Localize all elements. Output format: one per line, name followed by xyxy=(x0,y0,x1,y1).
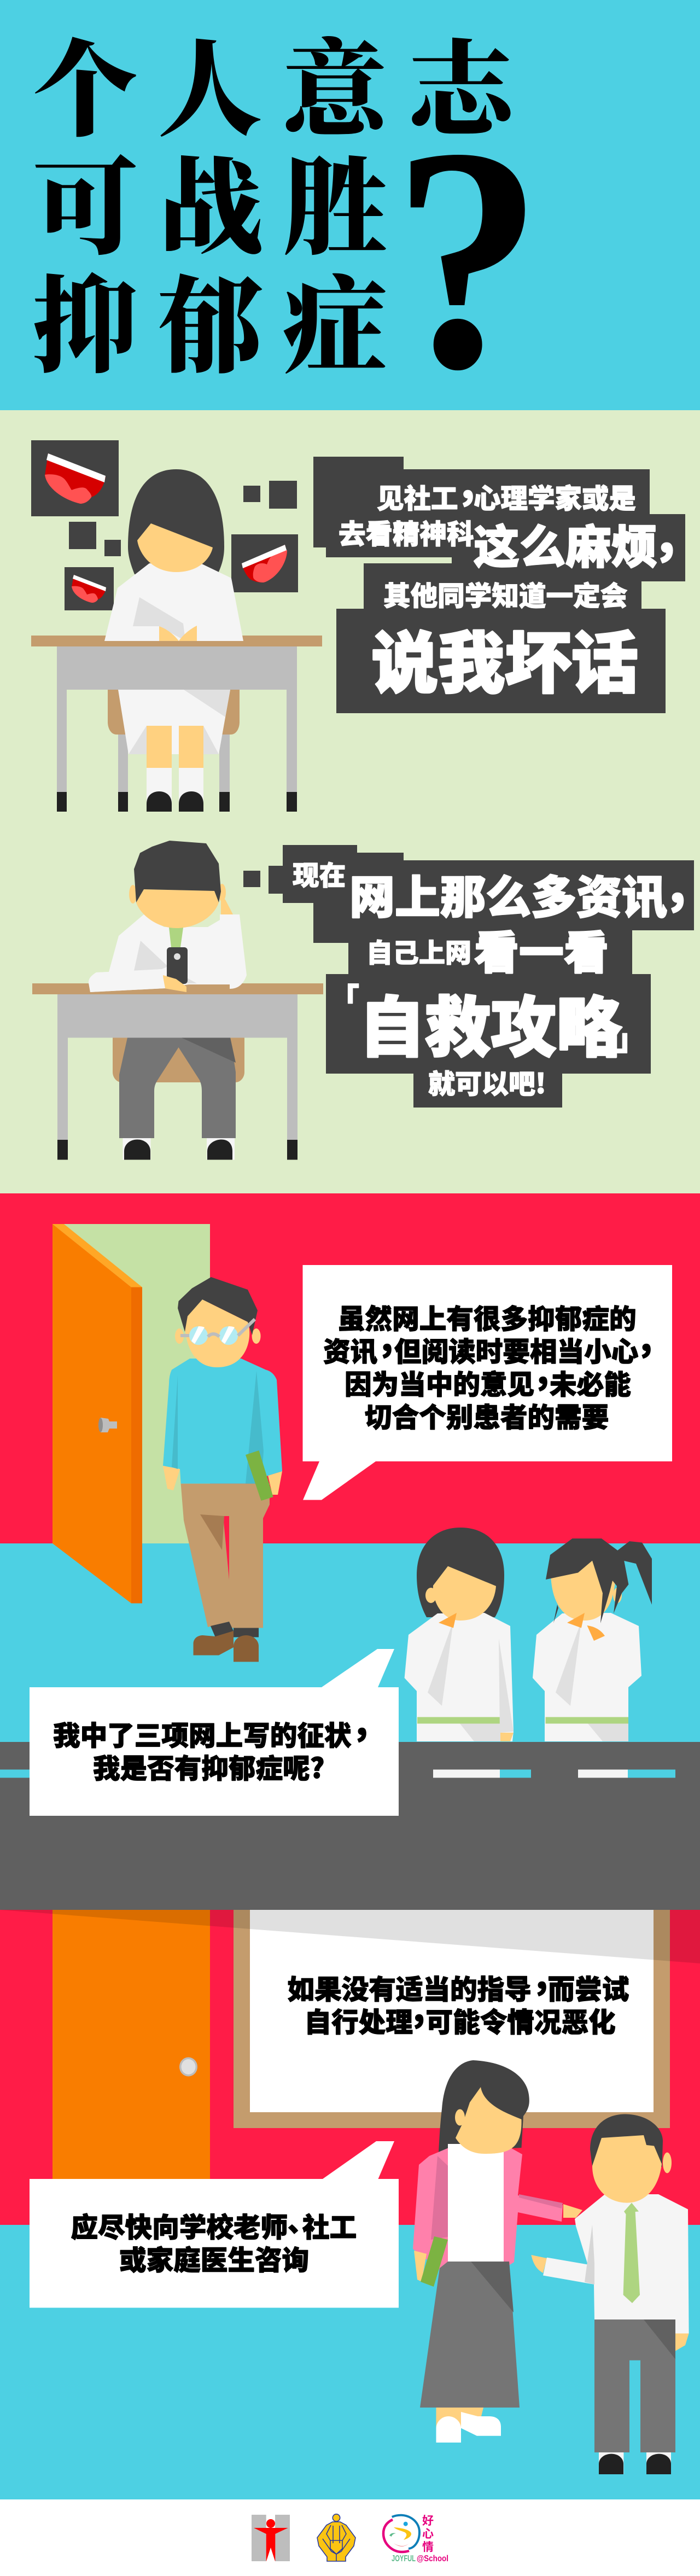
panel: teachers consulting xyxy=(0,1910,700,2474)
callout: gossip worry: 心理学家或是 xyxy=(474,477,636,516)
woman xyxy=(413,2060,582,2443)
notice board: , xyxy=(536,1951,547,1998)
notice board xyxy=(234,1910,670,2128)
title: 抑郁症 xyxy=(33,242,387,393)
callout: self-help: , xyxy=(669,850,685,916)
speech bubble: teacher: , xyxy=(381,1313,393,1361)
callout: self-help: 看一看 xyxy=(474,917,609,982)
speech bubble: teacher: 切合个别患者的需要 xyxy=(365,1396,609,1435)
callout: gossip worry: 见社工 xyxy=(377,477,458,516)
girl upper body xyxy=(104,523,243,641)
callout: self-help xyxy=(243,845,694,1108)
thought squares xyxy=(69,481,297,556)
logo: hands xyxy=(317,2514,355,2561)
callout: self-help: 现在 xyxy=(293,854,346,893)
mouth box: right xyxy=(231,534,298,592)
logo: joyful at school: @School xyxy=(417,2554,448,2563)
speech bubble: teacher: 虽然网上有很多抑郁症的 xyxy=(338,1297,637,1337)
girl at desk xyxy=(118,469,230,812)
panel: boy with phone xyxy=(32,841,323,1159)
teacher figure xyxy=(163,1277,282,1662)
logo: joyful at school: 心 xyxy=(422,2525,434,2542)
notice board: 自行处理 xyxy=(304,2001,413,2040)
boy upper body xyxy=(89,841,247,992)
callout: gossip worry: 这么麻烦 xyxy=(474,511,657,577)
callout: gossip worry: 说我坏话 xyxy=(371,610,638,707)
logo: joyful at school: JOYFUL xyxy=(392,2554,416,2563)
boy legs xyxy=(119,1038,236,1159)
speech bubble: teacher: 因为当中的意见 xyxy=(345,1363,534,1402)
panel: students xyxy=(0,1528,700,1910)
callout: gossip worry: 其他同学知道一定会 xyxy=(383,574,627,614)
mouth box: small xyxy=(65,567,114,610)
callout: gossip worry: , xyxy=(461,454,475,510)
notice board: 而尝试 xyxy=(548,1968,629,2007)
chair xyxy=(113,1038,244,1082)
title: 个人意志 xyxy=(33,6,523,157)
desk xyxy=(31,636,322,812)
callout: self-help: 自己上网 xyxy=(366,931,471,970)
speech bubble: student xyxy=(30,1649,399,1816)
speech bubble: teacher xyxy=(303,1265,672,1500)
callout: gossip worry: , xyxy=(658,500,674,566)
man xyxy=(531,2114,689,2474)
student one xyxy=(405,1528,514,1741)
big question mark: ? xyxy=(392,82,543,435)
callout: gossip worry xyxy=(313,454,685,713)
title: 可战胜 xyxy=(33,124,388,275)
speech bubble: teacher: , xyxy=(537,1346,549,1394)
panel: gossip scene xyxy=(31,440,322,812)
speech bubble: student: 我是否有抑郁症呢? xyxy=(93,1747,324,1786)
speech bubble: advice xyxy=(30,2141,399,2308)
logo: joyful at school xyxy=(383,2512,448,2563)
callout: self-help: 网上那么多资讯 xyxy=(349,861,667,926)
closed door xyxy=(52,1910,210,2225)
ceiling shadow xyxy=(0,1910,700,1963)
notice board: 如果没有适当的指导 xyxy=(288,1968,532,2007)
speech bubble: student: 我中了三项网上写的征状 xyxy=(53,1714,352,1753)
callout: self-help: 」 xyxy=(616,1015,646,1059)
footer logos xyxy=(252,2512,448,2563)
speech bubble: advice: 或家庭医生咨询 xyxy=(119,2239,309,2278)
mouth box: large xyxy=(31,440,119,516)
road xyxy=(0,1742,700,1910)
callout: self-help: 自救攻略 xyxy=(359,975,622,1070)
logo: red figure xyxy=(252,2515,290,2561)
speech bubble: advice: 、 xyxy=(288,2200,315,2240)
speech bubble: teacher: , xyxy=(640,1313,652,1361)
logo: joyful at school: 情 xyxy=(422,2538,434,2555)
desk xyxy=(32,983,323,1159)
speech bubble: teacher: 但阅读时要相当小心 xyxy=(394,1330,638,1369)
chair xyxy=(108,690,240,812)
speech bubble: student: , xyxy=(356,1697,368,1745)
callout: self-help: 「 xyxy=(329,975,359,1019)
student two xyxy=(533,1538,652,1741)
speech bubble: teacher: 资讯 xyxy=(323,1330,377,1369)
title xyxy=(33,6,523,393)
speech bubble: teacher: 未必能 xyxy=(550,1363,631,1402)
speech bubble: advice: 社工 xyxy=(302,2206,357,2245)
door xyxy=(52,1224,210,1604)
panel: teacher at door xyxy=(52,1224,672,1662)
logo: joyful at school: 好 xyxy=(422,2512,434,2528)
notice board: , xyxy=(413,1984,425,2031)
callout: gossip worry: 去看精神科 xyxy=(339,513,474,552)
notice board: 可能令情况恶化 xyxy=(425,2001,616,2040)
speech bubble: advice: 应尽快向学校老师 xyxy=(71,2206,288,2245)
callout: self-help: 就可以吧! xyxy=(428,1063,546,1101)
